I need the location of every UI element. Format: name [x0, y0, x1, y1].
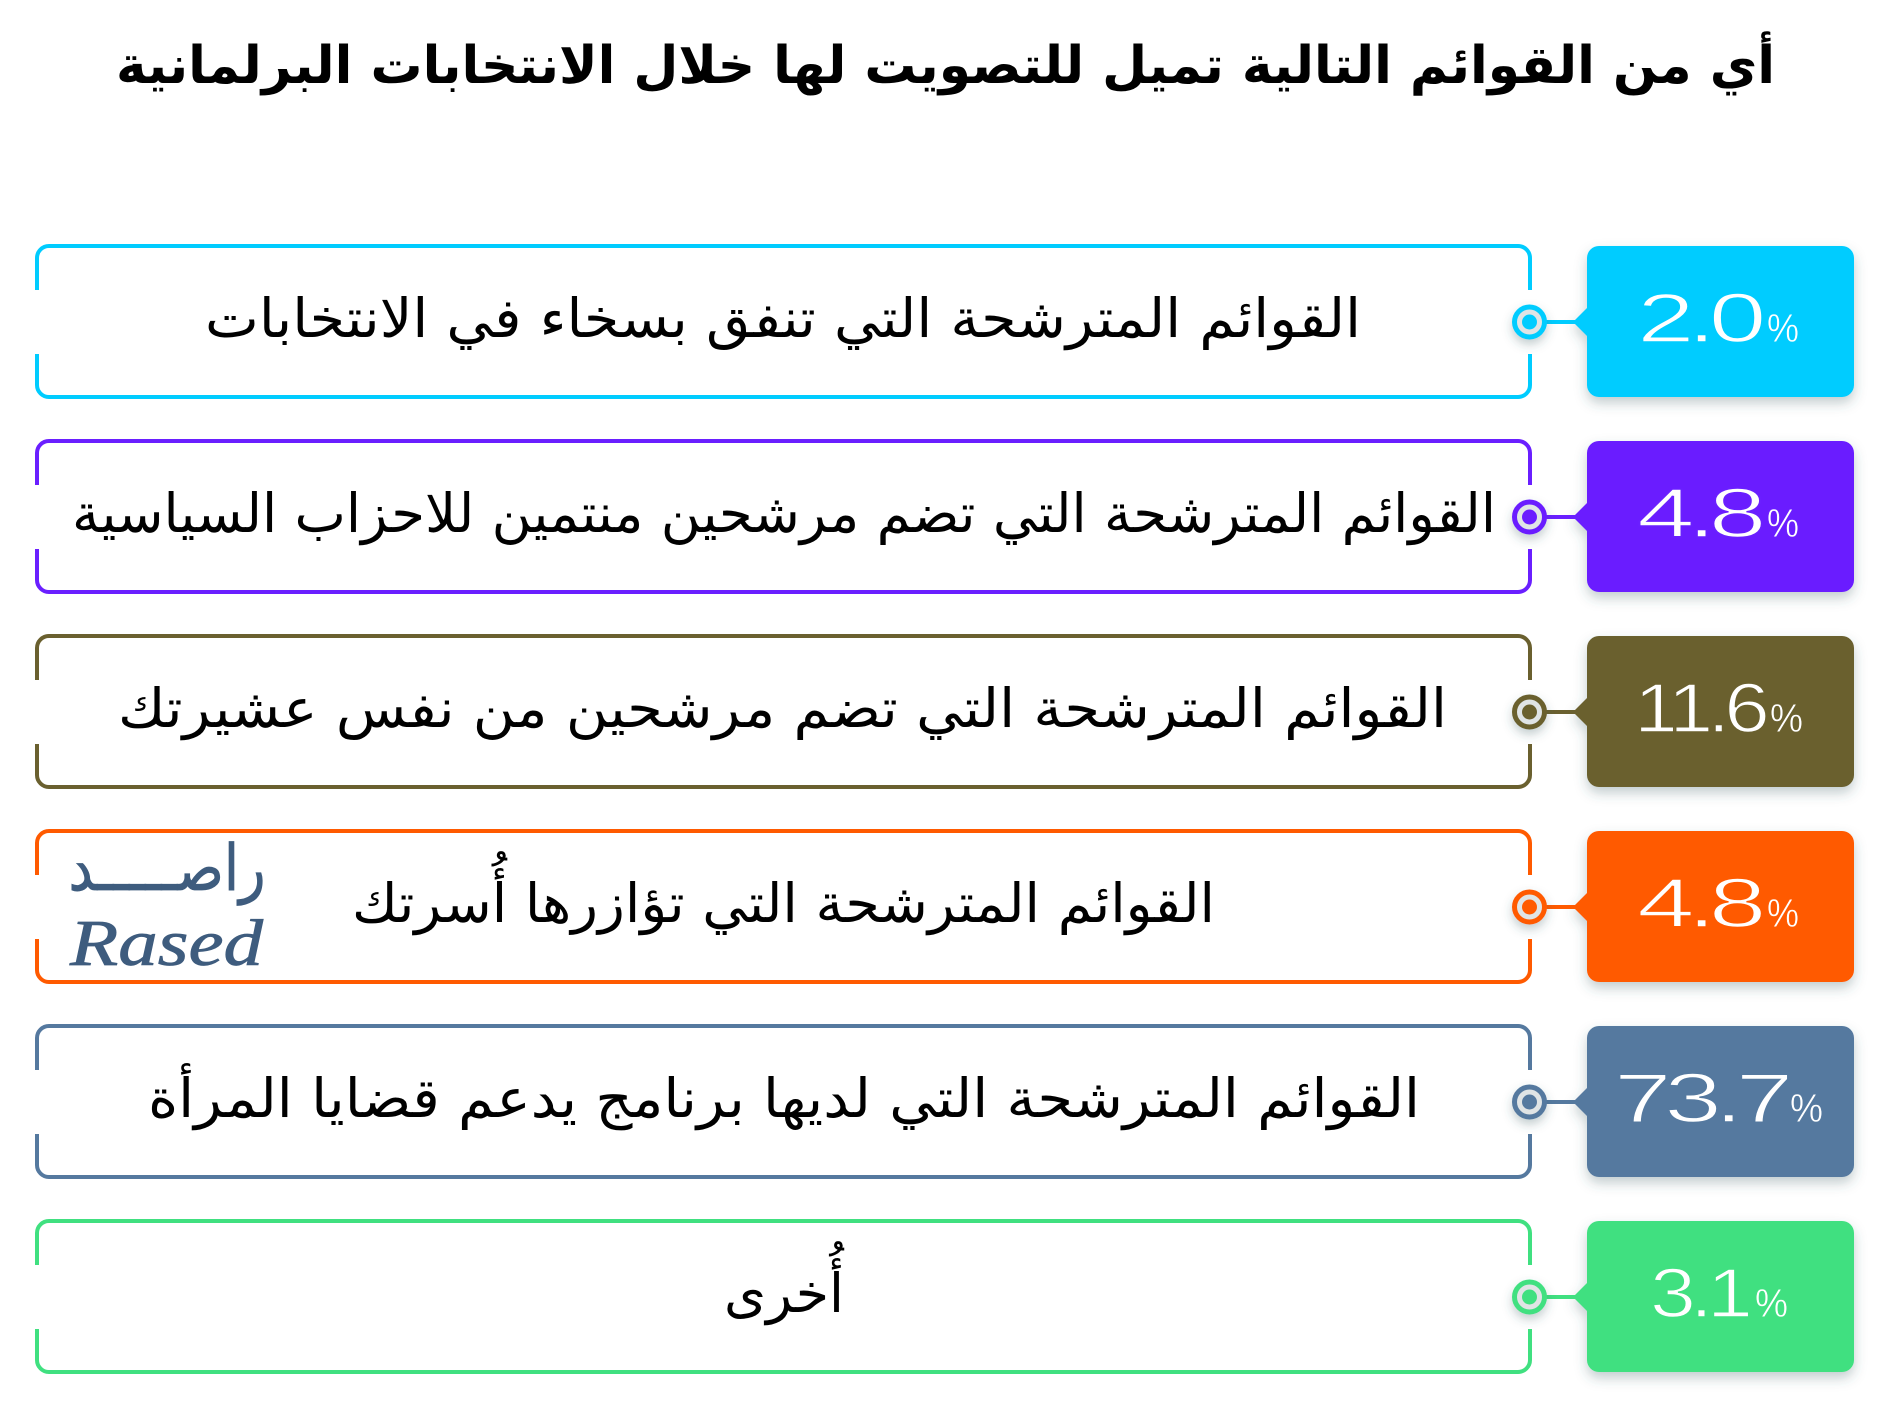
percent sign: %	[1790, 1087, 1823, 1131]
percent sign: %	[1770, 697, 1803, 741]
row label: القوائم المترشحة التي لديها برنامج يدعم قضايا المرأة	[148, 1063, 1420, 1131]
connector node	[1514, 697, 1544, 727]
panel outline	[37, 246, 1530, 397]
connector node	[1514, 502, 1544, 532]
percent sign: %	[1767, 502, 1799, 546]
connector line	[1545, 710, 1579, 714]
row label: القوائم المترشحة التي تؤازرها أُسرتك	[352, 851, 1215, 935]
value tag	[1575, 1221, 1854, 1372]
percent sign: %	[1767, 307, 1799, 351]
percent sign: %	[1755, 1282, 1788, 1326]
row 4: orange	[37, 831, 1854, 982]
logo arabic wordmark: راصـــــد	[68, 832, 266, 906]
value tag	[1575, 831, 1854, 982]
connector line	[1545, 905, 1579, 909]
value tag	[1575, 246, 1854, 397]
connector node	[1514, 1282, 1544, 1312]
panel outline	[37, 441, 1530, 592]
panel outline	[37, 831, 1530, 982]
panel outline	[37, 636, 1530, 787]
logo: Rased	[68, 832, 266, 980]
row 6: green	[37, 1221, 1854, 1372]
title: أي من القوائم التالية تميل للتصويت لها خلال الانتخابات البرلمانية	[116, 31, 1775, 96]
connector line	[1545, 1100, 1579, 1104]
row 5: steel blue	[37, 1026, 1854, 1177]
connector node	[1514, 307, 1544, 337]
value: 11.6	[1634, 669, 1766, 747]
connector line	[1545, 320, 1579, 324]
panel outline	[37, 1221, 1530, 1372]
row label: القوائم المترشحة التي تضم مرشحين من نفس عشيرتك	[118, 677, 1447, 740]
value: 4.8	[1637, 474, 1762, 552]
connector node	[1514, 892, 1544, 922]
value: 3.1	[1650, 1254, 1749, 1332]
logo latin wordmark: Rased	[69, 907, 264, 980]
row label: القوائم المترشحة التي تضم مرشحين منتمين للاحزاب السياسية	[72, 482, 1496, 545]
row 1: cyan	[37, 246, 1854, 397]
value tag	[1575, 636, 1854, 787]
row 2: purple	[37, 441, 1854, 592]
value: 73.7	[1614, 1059, 1789, 1137]
value: 4.8	[1637, 864, 1762, 942]
value tag	[1575, 1026, 1854, 1177]
row 3: olive	[37, 636, 1854, 787]
value tag	[1575, 441, 1854, 592]
connector node	[1514, 1087, 1544, 1117]
value: 2.0	[1637, 279, 1764, 357]
connector line	[1545, 1295, 1579, 1299]
percent sign: %	[1767, 892, 1799, 936]
connector line	[1545, 515, 1579, 519]
panel outline	[37, 1026, 1530, 1177]
row label: القوائم المترشحة التي تنفق بسخاء في الانتخابات	[205, 287, 1361, 351]
row label: أُخرى	[724, 1241, 845, 1325]
